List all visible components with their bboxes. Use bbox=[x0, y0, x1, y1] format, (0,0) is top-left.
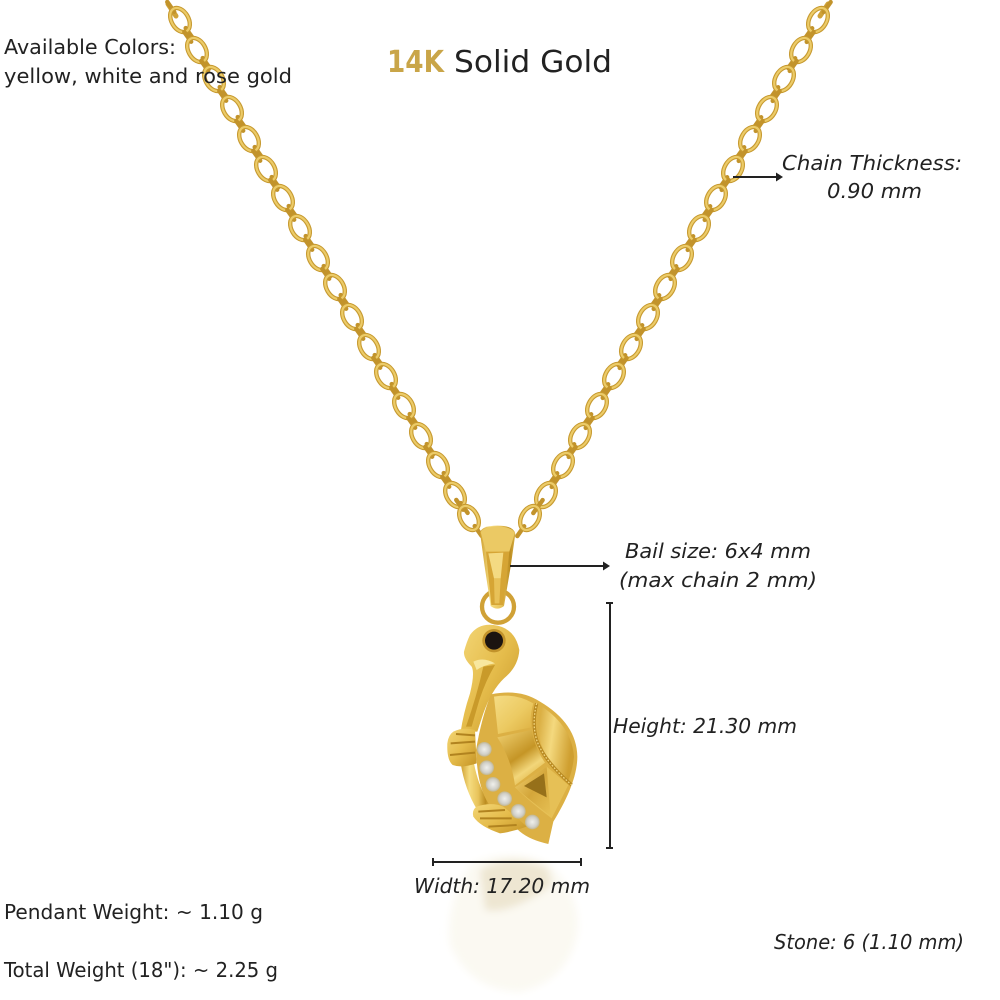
chain thickness label: 0.90 mm bbox=[827, 179, 922, 203]
shell plates bbox=[494, 696, 574, 818]
plate: top bbox=[494, 696, 533, 734]
plate: lower bbox=[515, 767, 568, 818]
chain thickness arrow bbox=[733, 172, 783, 182]
stone label: Stone: 6 (1.10 mm) bbox=[774, 930, 964, 954]
height dimension line bbox=[606, 602, 613, 848]
small stones bbox=[477, 742, 540, 829]
pendant reflection bbox=[449, 855, 578, 992]
chain thickness label bbox=[782, 151, 962, 203]
bail bbox=[480, 526, 515, 609]
bail size arrow bbox=[510, 562, 610, 570]
hand lower bbox=[473, 804, 527, 833]
plate: right bbox=[539, 707, 574, 781]
height label: Height: 21.30 mm bbox=[613, 714, 797, 738]
title: 14K bbox=[387, 45, 446, 80]
head and arm bbox=[461, 625, 519, 732]
title: Solid Gold bbox=[454, 45, 612, 80]
width dimension line bbox=[433, 858, 581, 866]
weights text bbox=[3, 900, 278, 982]
width label: Width: 17.20 mm bbox=[414, 874, 590, 898]
hand upper bbox=[447, 729, 477, 766]
turtle pendant bbox=[447, 526, 577, 844]
left chain bbox=[162, 0, 487, 541]
lower arm bbox=[461, 763, 490, 810]
plate: centre bbox=[497, 730, 545, 785]
available colors text: yellow, white and rose gold bbox=[4, 64, 292, 88]
title bbox=[387, 45, 612, 80]
bail size label bbox=[619, 539, 817, 592]
weights text: Pendant Weight: ~ 1.10 g bbox=[4, 900, 263, 924]
available colors text: Available Colors: bbox=[4, 35, 176, 59]
beaded seam bbox=[534, 703, 572, 785]
jump ring bbox=[482, 591, 514, 623]
bail size label: (max chain 2 mm) bbox=[619, 568, 817, 592]
bail size label: Bail size: 6x4 mm bbox=[625, 539, 811, 563]
right chain bbox=[512, 0, 836, 541]
black stone bbox=[482, 629, 506, 652]
weights text: Total Weight (18"): ~ 2.25 g bbox=[3, 958, 278, 982]
arm shading bbox=[466, 665, 495, 727]
shell silhouette bbox=[476, 692, 577, 844]
chain thickness label: Chain Thickness: bbox=[782, 151, 962, 175]
available colors text bbox=[4, 35, 292, 88]
